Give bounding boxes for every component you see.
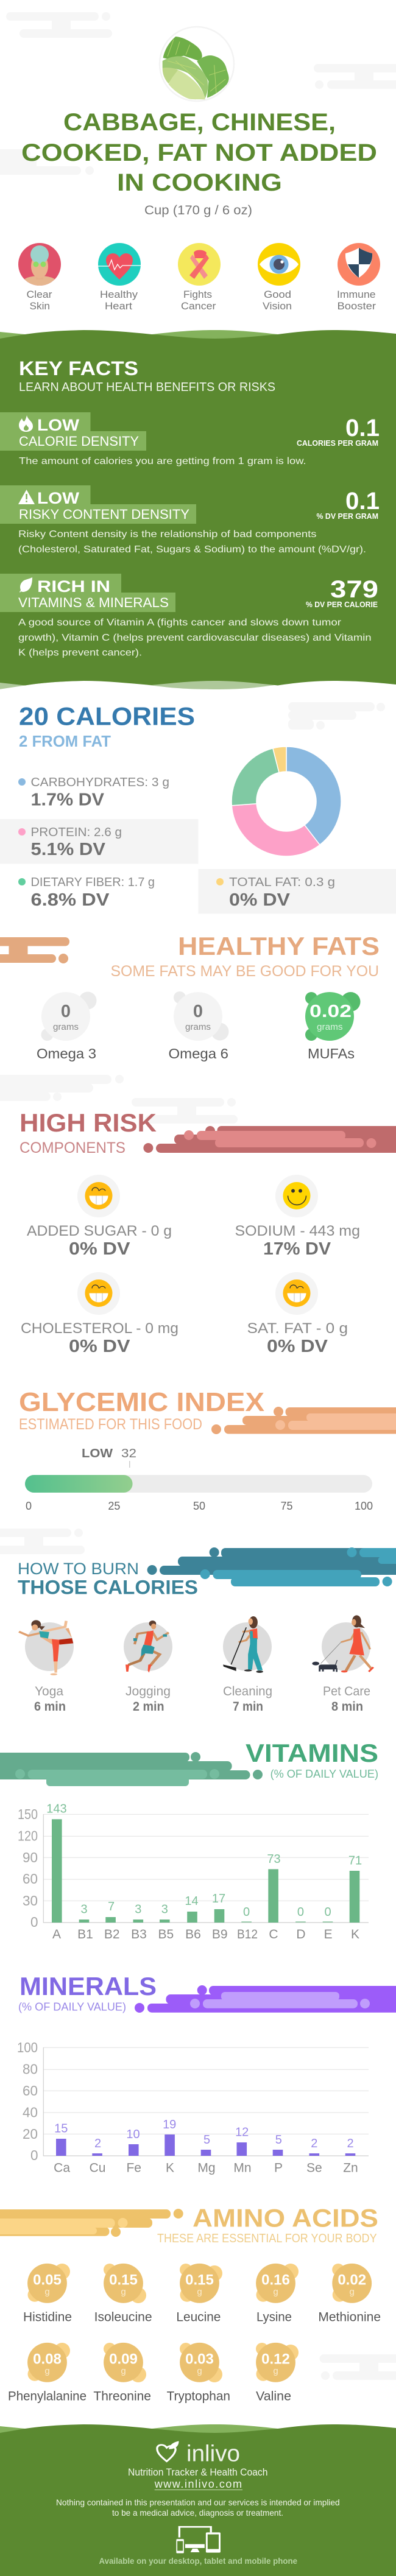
- fact: risky content density: [0, 485, 380, 555]
- bar chart: vitamins: B9: [212, 1927, 228, 1941]
- stat: omega 3: Omega 3: [37, 1046, 96, 1061]
- amino: valine: g: [273, 2366, 278, 2376]
- stat: cholesterol: CHOLESTEROL - 0 mg: [21, 1320, 179, 1337]
- label: [27, 289, 52, 312]
- value: 379: [330, 576, 378, 603]
- stat: omega 6: 0: [193, 1002, 203, 1021]
- amino: leucine: [176, 2264, 222, 2324]
- legend: total fat: [199, 869, 396, 913]
- amino: valine: 0.12: [261, 2351, 290, 2368]
- decoration: header bars: [0, 2209, 183, 2237]
- panel: minerals: [17, 1972, 396, 2175]
- activity: jogging: [124, 1621, 172, 1714]
- bar chart: vitamins: 150: [18, 1806, 38, 1822]
- amino: leucine: Leucine: [176, 2310, 221, 2324]
- bar chart: vitamins: [18, 1803, 369, 1941]
- description: growth), Vitamin C (helps prevent cardiovascular diseases) and Vitamin: [18, 633, 372, 643]
- heading: AMINO ACIDS: [193, 2204, 378, 2233]
- legend: dietary fiber: DIETARY FIBER: 1.7 g: [30, 876, 155, 889]
- label: RISKY CONTENT DENSITY: [19, 507, 189, 522]
- panel: amino acids: [0, 2204, 381, 2404]
- stat: MUFAs: MUFAs: [308, 1046, 355, 1061]
- subheading: 2 FROM FAT: [19, 732, 111, 750]
- bar chart: vitamins: C: [269, 1927, 278, 1941]
- stat: MUFAs: grams: [317, 1022, 342, 1032]
- description: (Cholesterol, Saturated Fat, Sugars & Sodium) to the amount (%DV/gr).: [18, 544, 366, 555]
- bar chart: minerals: Fe: [126, 2161, 141, 2175]
- title: COOKED, FAT NOT ADDED: [21, 139, 377, 166]
- legend: protein: [0, 819, 199, 864]
- stat: saturated fat: SAT. FAT - 0 g: [247, 1320, 348, 1337]
- bar chart: minerals: Zn: [343, 2161, 358, 2175]
- decoration: header bars: [211, 1407, 396, 1434]
- description: The amount of calories you are getting from 1 gram is low.: [19, 456, 306, 466]
- stat: sodium: SODIUM - 443 mg: [235, 1223, 360, 1239]
- panel: key facts: [0, 330, 396, 689]
- amino: isoleucine: Isoleucine: [94, 2310, 152, 2324]
- bar chart: minerals: Se: [306, 2161, 322, 2175]
- subheading: ESTIMATED FOR THIS FOOD: [19, 1416, 202, 1433]
- icon: flame: [19, 415, 33, 432]
- legend: carbohydrates: [18, 776, 169, 810]
- bar chart: vitamins: 3: [161, 1903, 168, 1916]
- logo: inlivo: [157, 2441, 240, 2467]
- bar chart: vitamins: B12: [237, 1927, 258, 1941]
- stat: cholesterol: [21, 1272, 179, 1356]
- label: LOW: [37, 416, 80, 434]
- amino: lysine: 0.16: [261, 2272, 290, 2289]
- bar chart: minerals: 2: [94, 2137, 101, 2150]
- disclaimer: [56, 2497, 340, 2518]
- bar chart: vitamins: B2: [104, 1927, 120, 1941]
- panel: healthy fats: [0, 932, 380, 1061]
- benefits row: [18, 243, 380, 312]
- bar chart: vitamins: B6: [185, 1927, 201, 1941]
- footer: [0, 2424, 396, 2576]
- panel: vitamins: [0, 1739, 378, 1941]
- icon: fights cancer ribbon: [178, 243, 221, 286]
- amino: lysine: Lysine: [256, 2310, 292, 2324]
- legend: total fat: TOTAL FAT: 0.3 g: [229, 876, 335, 889]
- stat: omega 3: 0: [61, 1002, 71, 1021]
- bar chart: minerals: 40: [23, 2105, 38, 2120]
- label: LOW: [37, 489, 80, 507]
- bar chart: vitamins: 120: [18, 1828, 38, 1844]
- website link: www.inlivo.com: [154, 2478, 242, 2490]
- amino: tryptophan: 0.03: [185, 2351, 214, 2368]
- activity: yoga: 6 min: [34, 1700, 66, 1714]
- label: RICH IN: [37, 577, 110, 596]
- bar chart: minerals: K: [166, 2161, 174, 2175]
- amino: threonine: g: [121, 2366, 126, 2376]
- bar chart: vitamins: 73: [267, 1853, 281, 1866]
- label: [181, 289, 216, 312]
- fact: calorie density: [0, 412, 380, 466]
- bar chart: minerals: 10: [126, 2128, 140, 2141]
- bar chart: vitamins: 90: [23, 1849, 38, 1865]
- gauge scale: 100: [355, 1500, 373, 1512]
- bar chart: minerals: 19: [163, 2118, 176, 2131]
- bar chart: vitamins: 7: [108, 1900, 115, 1913]
- decoration: header bars: [143, 1126, 396, 1153]
- bar chart: vitamins: 60: [23, 1871, 38, 1887]
- bar chart: minerals: 2: [347, 2137, 354, 2150]
- bar chart: minerals: 15: [54, 2122, 68, 2136]
- donut chart: [232, 747, 341, 856]
- label: CALORIE DENSITY: [19, 434, 139, 449]
- bar chart: vitamins: 0: [30, 1914, 38, 1930]
- bar chart: minerals: 20: [23, 2126, 38, 2142]
- stat: omega 3: [37, 991, 96, 1061]
- label: [263, 289, 292, 312]
- legend: carbohydrates: 1.7% DV: [30, 790, 105, 810]
- decoration: header bars: [147, 1547, 396, 1586]
- unit: % DV PER GRAM: [317, 512, 378, 521]
- label: Vision: [263, 300, 292, 312]
- heading: 20 CALORIES: [19, 702, 195, 731]
- tagline: Nutrition Tracker & Health Coach: [128, 2466, 268, 2478]
- amino: lysine: g: [273, 2287, 278, 2297]
- unit: % DV PER CALORIE: [306, 600, 378, 609]
- bar chart: minerals: 80: [23, 2061, 38, 2077]
- gauge scale: [26, 1500, 373, 1512]
- amino: histidine: Histidine: [23, 2310, 72, 2324]
- bar chart: minerals: 5: [203, 2133, 210, 2147]
- label: Cancer: [181, 300, 216, 312]
- label: Good: [264, 289, 291, 300]
- panel: how to burn those calories: [18, 1547, 396, 1714]
- stat: MUFAs: [305, 992, 361, 1061]
- label: Booster: [338, 300, 376, 312]
- label: [100, 289, 138, 312]
- subheading: (% OF DAILY VALUE): [18, 2001, 126, 2013]
- activity: yoga: Yoga: [35, 1684, 63, 1698]
- amino: isoleucine: g: [121, 2287, 126, 2297]
- title: IN COOKING: [117, 169, 282, 196]
- panel: glycemic index: [19, 1387, 396, 1512]
- legend: protein: PROTEIN: 2.6 g: [30, 826, 122, 839]
- icon: devices: [176, 2527, 221, 2553]
- gauge scale: 75: [280, 1500, 293, 1512]
- bar chart: minerals: 60: [23, 2083, 38, 2099]
- heading: HOW TO BURN: [18, 1560, 139, 1578]
- bar chart: minerals: 0: [30, 2147, 38, 2163]
- bar chart: minerals: Mn: [233, 2161, 252, 2175]
- amino: lysine: [256, 2264, 299, 2324]
- amino: threonine: 0.09: [109, 2351, 138, 2368]
- label: [337, 289, 376, 312]
- amino: histidine: [23, 2264, 72, 2324]
- stat: added sugar: [27, 1175, 172, 1259]
- amino: histidine: g: [44, 2287, 50, 2297]
- gauge label: 32: [121, 1447, 136, 1460]
- decoration: header bars: [0, 937, 69, 963]
- amino: methionine: [318, 2264, 381, 2324]
- bar chart: vitamins: 0: [297, 1906, 304, 1919]
- panel: calories: [0, 702, 396, 913]
- bar chart: vitamins: K: [351, 1927, 359, 1941]
- fact: rich in vitamins and minerals: [0, 574, 378, 658]
- bar chart: vitamins: D: [296, 1927, 306, 1941]
- activity: yoga: [19, 1620, 74, 1714]
- amino: phenylalanine: g: [44, 2366, 50, 2376]
- panel: high risk components: [19, 1108, 396, 1356]
- bar chart: vitamins: 3: [135, 1903, 141, 1916]
- description: [18, 618, 372, 658]
- label: Heart: [105, 300, 132, 312]
- amino: threonine: [93, 2343, 151, 2404]
- icon: warning: [18, 490, 35, 504]
- gauge label: [82, 1447, 136, 1460]
- gauge scale: 50: [193, 1500, 205, 1512]
- stat: sodium: 17% DV: [263, 1239, 331, 1259]
- activity: jogging: 2 min: [133, 1700, 164, 1714]
- amino: phenylalanine: Phenylalanine: [8, 2390, 87, 2404]
- bar chart: vitamins: B1: [77, 1927, 93, 1941]
- stat: saturated fat: [247, 1272, 348, 1356]
- amino: isoleucine: [94, 2264, 152, 2324]
- bar chart: vitamins: B3: [131, 1927, 147, 1941]
- legend: dietary fiber: 6.8% DV: [30, 890, 110, 910]
- amino: methionine: 0.02: [338, 2272, 366, 2289]
- stat: omega 6: [168, 991, 229, 1061]
- heading: HEALTHY FATS: [178, 932, 380, 960]
- activity: cleaning: Cleaning: [223, 1684, 272, 1698]
- heading: THOSE CALORIES: [18, 1576, 198, 1598]
- amino: phenylalanine: [8, 2343, 87, 2404]
- header: food image and title: [21, 27, 377, 217]
- description: [18, 529, 366, 555]
- logo: inlivo: inlivo: [186, 2441, 240, 2467]
- stat: omega 6: Omega 6: [168, 1046, 228, 1061]
- stat: cholesterol: 0% DV: [69, 1337, 130, 1356]
- icon: cabbage in circle: [160, 27, 234, 101]
- activity: cleaning: 7 min: [233, 1700, 263, 1714]
- bar chart: minerals: 5: [275, 2133, 282, 2147]
- bar chart: minerals: 12: [235, 2126, 249, 2139]
- stat: added sugar: ADDED SUGAR - 0 g: [27, 1223, 172, 1239]
- bar chart: vitamins: E: [324, 1927, 333, 1941]
- subheading: COMPONENTS: [19, 1139, 126, 1156]
- bar chart: vitamins: 0: [243, 1906, 250, 1919]
- stat: saturated fat: 0% DV: [267, 1337, 328, 1356]
- title: CABBAGE, CHINESE,: [63, 109, 336, 136]
- label: Skin: [29, 300, 50, 312]
- gauge scale: 0: [26, 1500, 32, 1512]
- bar chart: vitamins: 14: [185, 1895, 199, 1908]
- bar chart: vitamins: 3: [80, 1903, 88, 1916]
- amino: valine: Valine: [256, 2390, 291, 2404]
- serving size: Cup (170 g / 6 oz): [144, 203, 252, 217]
- stat: MUFAs: 0.02: [309, 1002, 352, 1021]
- value: 0.1: [345, 488, 380, 515]
- description: A good source of Vitamin A (fights cancer and slows down tumor: [18, 618, 342, 628]
- label: Immune: [337, 289, 375, 300]
- stat: omega 3: grams: [53, 1022, 79, 1032]
- gauge bar: [25, 1461, 372, 1493]
- label: VITAMINS & MINERALS: [18, 595, 169, 610]
- amino: leucine: 0.15: [185, 2272, 214, 2289]
- amino: leucine: g: [197, 2287, 202, 2297]
- legend: dietary fiber: [18, 876, 155, 910]
- amino: tryptophan: g: [197, 2366, 202, 2376]
- icon: immune booster shield: [338, 243, 380, 286]
- description: K (helps prevent cancer).: [18, 648, 142, 658]
- stat: omega 6: grams: [185, 1022, 211, 1032]
- bar chart: vitamins: B5: [158, 1927, 174, 1941]
- icon: clear skin: [18, 243, 61, 287]
- activity: pet care: Pet Care: [323, 1684, 370, 1698]
- stat: sodium: [235, 1175, 360, 1259]
- bar chart: vitamins: A: [52, 1927, 61, 1941]
- heading: HIGH RISK: [19, 1108, 157, 1137]
- amino: valine: [256, 2343, 299, 2404]
- amino: tryptophan: [167, 2343, 230, 2404]
- label: Clear: [27, 289, 52, 300]
- bar chart: vitamins: 0: [324, 1906, 331, 1919]
- value: 0.1: [345, 415, 380, 442]
- subheading: THESE ARE ESSENTIAL FOR YOUR BODY: [157, 2232, 377, 2245]
- heading: VITAMINS: [246, 1739, 378, 1767]
- activity: jogging: Jogging: [126, 1684, 171, 1698]
- activity: pet care: [312, 1615, 373, 1714]
- heading: KEY FACTS: [19, 357, 138, 379]
- amino: tryptophan: Tryptophan: [167, 2390, 230, 2404]
- activity: pet care: 8 min: [331, 1700, 363, 1714]
- gauge label: LOW: [82, 1447, 113, 1460]
- label: Fights: [183, 289, 212, 300]
- bar chart: minerals: 100: [17, 2039, 38, 2055]
- bar chart: minerals: Cu: [90, 2161, 105, 2175]
- legend: carbohydrates: CARBOHYDRATES: 3 g: [30, 776, 169, 789]
- stat: added sugar: 0% DV: [69, 1239, 130, 1259]
- bar chart: minerals: 2: [311, 2137, 317, 2150]
- subheading: SOME FATS MAY BE GOOD FOR YOU: [111, 963, 379, 980]
- bar chart: vitamins: 17: [212, 1892, 225, 1906]
- heading: MINERALS: [19, 1972, 157, 2001]
- amino: histidine: 0.05: [33, 2272, 62, 2289]
- amino: threonine: Threonine: [93, 2390, 151, 2404]
- amino: methionine: g: [350, 2287, 355, 2297]
- heading: GLYCEMIC INDEX: [19, 1387, 264, 1417]
- label: Healthy: [100, 289, 138, 300]
- subheading: (% OF DAILY VALUE): [270, 1768, 378, 1780]
- legend: total fat: 0% DV: [229, 890, 291, 910]
- bar chart: minerals: [17, 2039, 369, 2175]
- decoration: header bars: [0, 1752, 263, 1786]
- description: Risky Content density is the relationship of bad components: [18, 529, 317, 540]
- subheading: LEARN ABOUT HEALTH BENEFITS OR RISKS: [19, 381, 275, 394]
- activity: cleaning: [223, 1616, 272, 1714]
- unit: CALORIES PER GRAM: [297, 438, 378, 448]
- title: [21, 109, 377, 196]
- disclaimer: Nothing contained in this presentation and our services is intended or implied: [56, 2497, 340, 2507]
- icon: good vision eye: [258, 243, 300, 286]
- bar chart: minerals: Mg: [197, 2161, 216, 2175]
- icon: leaf: [19, 577, 32, 593]
- legend: protein: 5.1% DV: [30, 840, 106, 859]
- icon: healthy heart: [98, 243, 141, 286]
- amino: phenylalanine: 0.08: [33, 2351, 62, 2368]
- disclaimer: to be a medical advice, diagnosis or treatment.: [112, 2508, 283, 2518]
- amino: isoleucine: 0.15: [109, 2272, 138, 2289]
- availability note: Available on your desktop, tablet and mobile phone: [99, 2556, 297, 2566]
- bar chart: minerals: Ca: [54, 2161, 70, 2175]
- amino: methionine: Methionine: [318, 2310, 381, 2324]
- gauge scale: 25: [108, 1500, 120, 1512]
- bar chart: vitamins: 71: [348, 1854, 362, 1868]
- decoration: header bars: [135, 1985, 396, 2013]
- bar chart: minerals: P: [274, 2161, 283, 2175]
- bar chart: vitamins: 30: [23, 1893, 38, 1909]
- bar chart: vitamins: 143: [46, 1803, 67, 1816]
